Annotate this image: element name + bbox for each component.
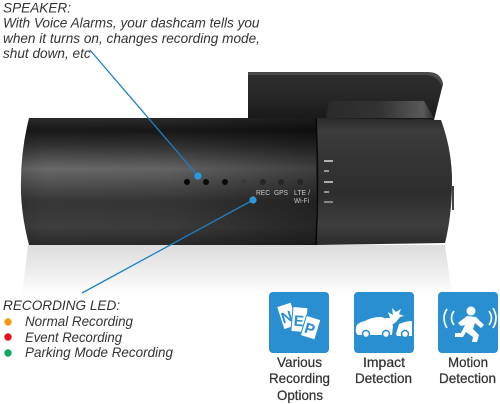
- label: [269, 354, 330, 403]
- camera reflection: [22, 245, 452, 295]
- speaker text: With Voice Alarms, your dashcam tells you: [3, 16, 260, 30]
- label: Recording: [269, 370, 330, 386]
- label: Impact: [363, 354, 405, 370]
- label: Motion: [448, 354, 488, 370]
- icon: recording cards: P: [302, 320, 317, 339]
- label: [355, 354, 412, 386]
- feature: various recording options: [269, 292, 330, 403]
- recording LED callout line: [82, 196, 257, 293]
- feature: motion detection: [438, 292, 498, 386]
- icon: running person with waves: [438, 292, 498, 353]
- LED labels: GPS: [274, 188, 288, 197]
- camera main barrel: [21, 118, 318, 245]
- speaker text: SPEAKER:: [3, 0, 71, 16]
- label: Detection: [355, 370, 412, 386]
- recording LED legend: [3, 298, 173, 360]
- icon: recording cards: E: [293, 313, 305, 330]
- icon: recording cards: N: [279, 308, 295, 327]
- feature: impact detection: [354, 292, 414, 386]
- normal recording: Normal Recording: [25, 314, 133, 329]
- tick marks: [324, 161, 333, 202]
- speaker text: shut down, etc: [3, 46, 91, 61]
- event recording: Event Recording: [25, 330, 122, 345]
- speaker callout line: [90, 50, 202, 180]
- side button: [452, 186, 454, 210]
- label: Various: [277, 354, 322, 370]
- icon: recording cards: [269, 292, 329, 353]
- LED labels: LTE /: [294, 188, 311, 197]
- LED labels: [256, 188, 311, 205]
- camera head: [316, 118, 452, 245]
- speaker text: [3, 0, 260, 61]
- indicator dots: [184, 179, 303, 185]
- label: Detection: [439, 370, 496, 386]
- LED labels: Wi-Fi: [294, 196, 309, 205]
- windshield mount: [248, 72, 443, 120]
- parking mode recording: Parking Mode Recording: [25, 345, 173, 360]
- label: Options: [277, 387, 323, 403]
- LED labels: REC: [256, 188, 271, 197]
- icon: car collision: [354, 292, 414, 353]
- speaker text: when it turns on, changes recording mode,: [3, 31, 260, 46]
- label: [439, 354, 496, 386]
- dashcam: [21, 72, 454, 245]
- barrel joint: [316, 118, 318, 245]
- recording LED legend: RECORDING LED:: [3, 298, 120, 313]
